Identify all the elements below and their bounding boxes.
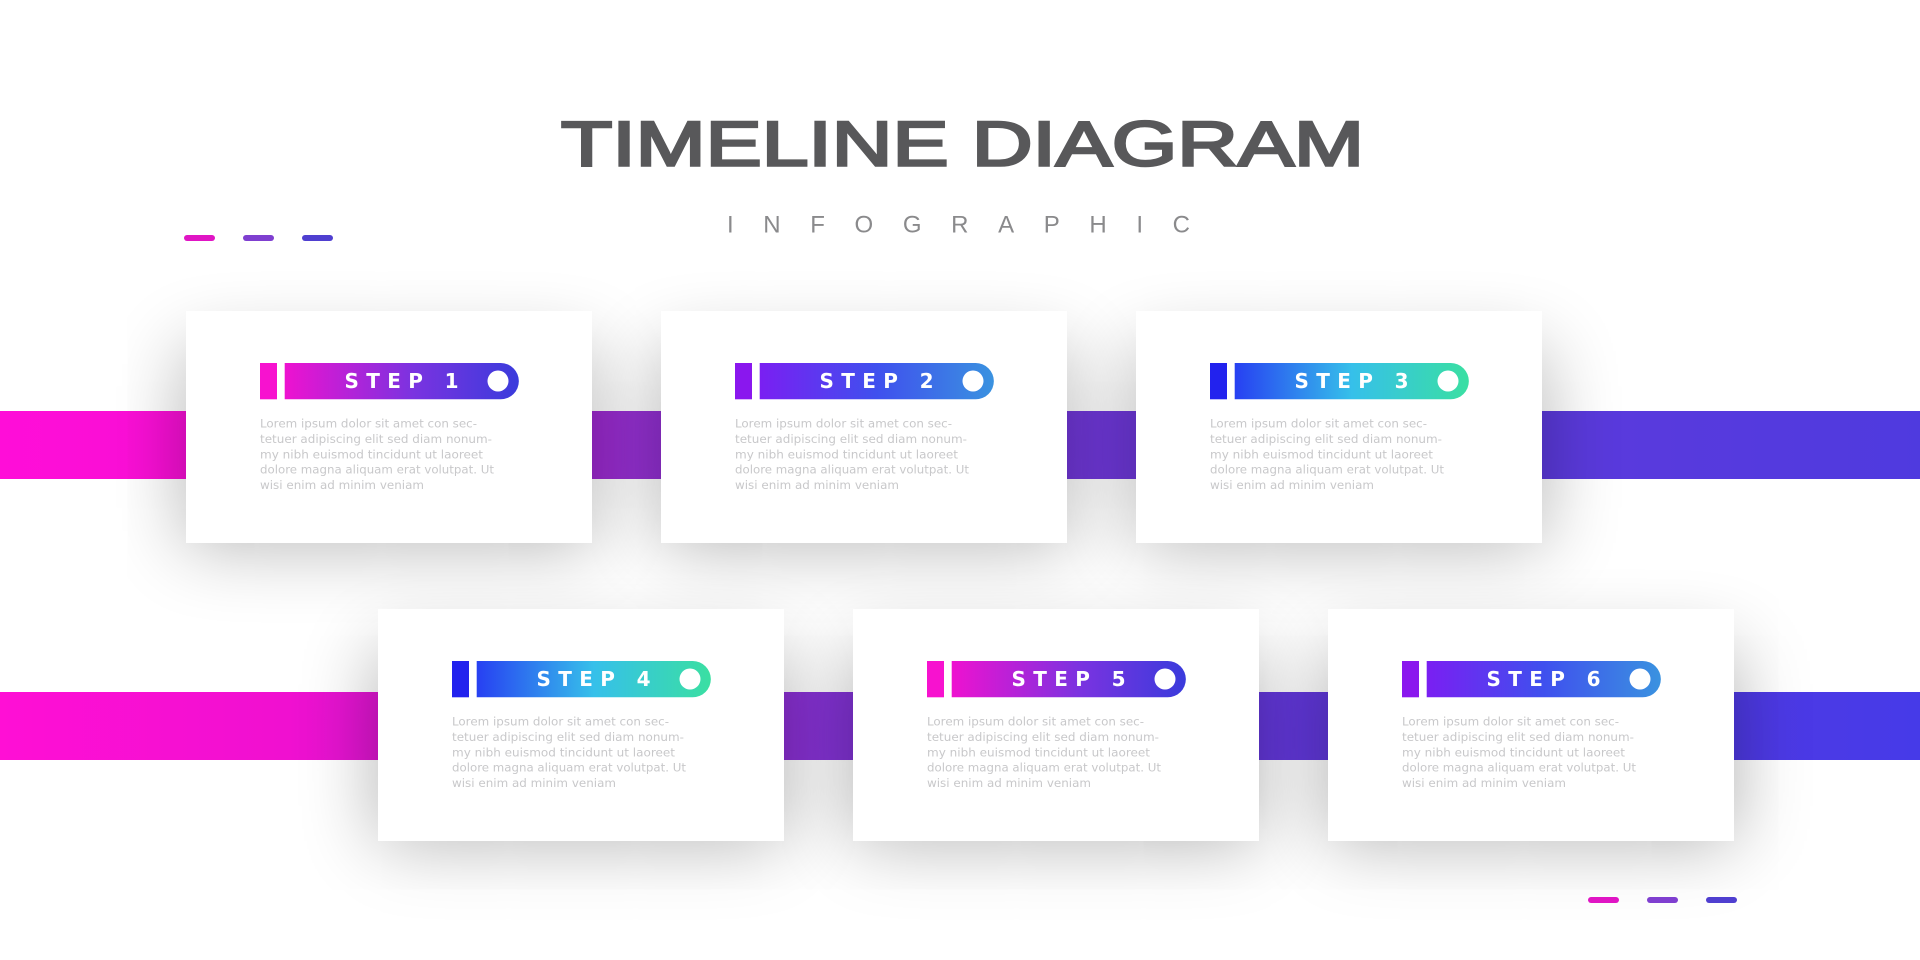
step 4 tag xyxy=(452,661,711,697)
step 3 text: Lorem ipsum dolor sit amet con sec- xyxy=(1210,416,1427,430)
step 5 text: my nibh euismod tincidunt ut laoreet xyxy=(927,745,1151,759)
step 1 tag: STEP 1 xyxy=(344,369,458,393)
step 3 tag: STEP 3 xyxy=(1294,369,1408,393)
panel: step 5 xyxy=(853,609,1259,841)
panel: step 3 xyxy=(1136,311,1542,543)
step 3 text xyxy=(1210,416,1445,492)
step 1 text xyxy=(260,416,495,492)
step 1 text: wisi enim ad minim veniam xyxy=(260,478,424,492)
step 2 text: tetuer adipiscing elit sed diam nonum- xyxy=(735,432,967,446)
step 6 tag: STEP 6 xyxy=(1486,667,1600,691)
panel: step 2 xyxy=(661,311,1067,543)
step 1 text: my nibh euismod tincidunt ut laoreet xyxy=(260,447,484,461)
step 3 tag xyxy=(1210,363,1469,399)
step 4 text: wisi enim ad minim veniam xyxy=(452,776,616,790)
panel: step 1 xyxy=(186,311,592,543)
step 5 tag: STEP 5 xyxy=(1012,667,1126,691)
step 4 text: dolore magna aliquam erat volutpat. Ut xyxy=(452,761,687,775)
step 5 text: wisi enim ad minim veniam xyxy=(927,776,1091,790)
step 1 text: Lorem ipsum dolor sit amet con sec- xyxy=(260,416,477,430)
step 3 text: wisi enim ad minim veniam xyxy=(1210,478,1374,492)
step 4 text: Lorem ipsum dolor sit amet con sec- xyxy=(452,714,669,728)
timeline band: row 2 xyxy=(0,692,1920,760)
step 2 text xyxy=(735,416,970,492)
step 5 text: dolore magna aliquam erat volutpat. Ut xyxy=(927,761,1162,775)
step 3 text: dolore magna aliquam erat volutpat. Ut xyxy=(1210,463,1445,477)
step 2 text: wisi enim ad minim veniam xyxy=(735,478,899,492)
step 5 text xyxy=(927,714,1162,790)
step 4 text: my nibh euismod tincidunt ut laoreet xyxy=(452,745,676,759)
step 6 tag xyxy=(1402,661,1661,697)
decorative dashes: top left xyxy=(184,235,333,241)
step 6 text: wisi enim ad minim veniam xyxy=(1402,776,1566,790)
step 3 text: my nibh euismod tincidunt ut laoreet xyxy=(1210,447,1434,461)
timeline band: row 1 xyxy=(0,411,1920,479)
step 5 tag xyxy=(927,661,1186,697)
step 3 text: tetuer adipiscing elit sed diam nonum- xyxy=(1210,432,1442,446)
step 5 text: tetuer adipiscing elit sed diam nonum- xyxy=(927,730,1159,744)
step 4 tag: STEP 4 xyxy=(536,667,650,691)
step 6 text: tetuer adipiscing elit sed diam nonum- xyxy=(1402,730,1634,744)
title: TIMELINE DIAGRAM xyxy=(561,109,1364,179)
step 1 tag xyxy=(260,363,519,399)
step 2 tag xyxy=(735,363,994,399)
step 2 text: my nibh euismod tincidunt ut laoreet xyxy=(735,447,959,461)
step 5 text: Lorem ipsum dolor sit amet con sec- xyxy=(927,714,1144,728)
step 6 text xyxy=(1402,714,1637,790)
step 2 text: dolore magna aliquam erat volutpat. Ut xyxy=(735,463,970,477)
decorative dashes: bottom right xyxy=(1588,897,1737,903)
step 6 text: Lorem ipsum dolor sit amet con sec- xyxy=(1402,714,1619,728)
panel: step 4 xyxy=(378,609,784,841)
step 1 text: dolore magna aliquam erat volutpat. Ut xyxy=(260,463,495,477)
step 4 text: tetuer adipiscing elit sed diam nonum- xyxy=(452,730,684,744)
subtitle: INFOGRAPHIC xyxy=(727,212,1190,239)
step 1 text: tetuer adipiscing elit sed diam nonum- xyxy=(260,432,492,446)
step 2 tag: STEP 2 xyxy=(820,369,934,393)
panel: step 6 xyxy=(1328,609,1734,841)
step 4 text xyxy=(452,714,687,790)
step 6 text: my nibh euismod tincidunt ut laoreet xyxy=(1402,745,1626,759)
step 2 text: Lorem ipsum dolor sit amet con sec- xyxy=(735,416,952,430)
step 6 text: dolore magna aliquam erat volutpat. Ut xyxy=(1402,761,1637,775)
